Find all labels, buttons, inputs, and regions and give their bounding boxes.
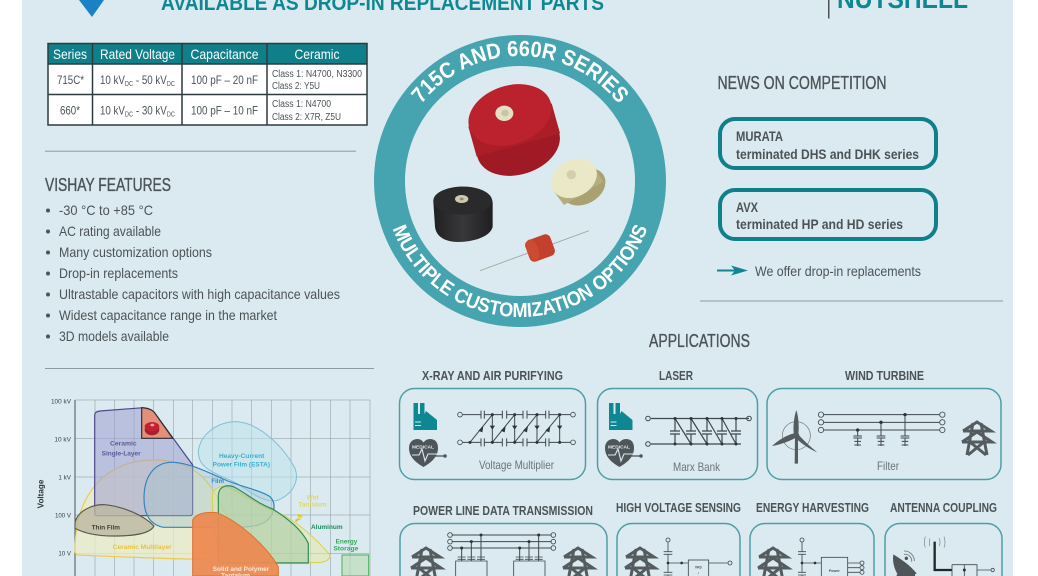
application: antenna coupling [885, 500, 1002, 576]
heading: news on competition: NEWS ON COMPETITION [718, 73, 886, 93]
circuit: sensing: VRS [695, 566, 703, 570]
region: energy storage [342, 555, 369, 576]
icon: satellite dish and antenna [893, 537, 994, 576]
chart labels: Storage [333, 546, 359, 553]
capacitor: black [433, 187, 493, 242]
circuit: sensing [664, 538, 732, 576]
application: x-ray and air purifying: Voltage Multiplier [479, 458, 554, 472]
specification table: 10 kV [100, 73, 131, 87]
region: highlight series [142, 408, 173, 438]
arrow: wet tantalum pointer [295, 514, 303, 523]
specification table [48, 44, 367, 125]
chart labels: Power Film (ESTA) [213, 461, 270, 468]
application: power line data transmission: POWER LINE DATA TRANSMISSION [413, 503, 593, 518]
badge: product ring [374, 35, 666, 327]
application: energy harvesting [750, 500, 874, 576]
specification table: Rated Voltage [100, 46, 175, 62]
heading: nutshell [828, 0, 968, 18]
application: power line data transmission [400, 503, 607, 576]
chart labels: Heavy-Current [219, 453, 265, 460]
capacitor: large red [460, 74, 568, 186]
feature list: -30 °C to +85 °C [59, 202, 153, 218]
axis labels: 100 V [55, 512, 72, 519]
capacitor: axial red [480, 231, 589, 271]
region: aluminum [218, 486, 308, 563]
chart labels: Wet [307, 495, 319, 502]
region: wet tantalum [212, 487, 330, 563]
note: drop-in replacements: We offer drop-in replacements [755, 263, 921, 279]
feature list: Ultrastable capacitors with high capacitance values [59, 286, 340, 302]
specification table: DC [167, 112, 175, 118]
axis labels: 10 V [58, 551, 72, 558]
application: laser: Marx Bank [673, 460, 721, 474]
ring text: top: 715C AND 660R SERIES [410, 40, 628, 102]
logo triangle [79, 0, 104, 17]
specification table: Capacitance [190, 46, 259, 62]
axis labels: 10 kV [54, 436, 72, 443]
heading: applications: APPLICATIONS [649, 331, 750, 351]
chart labels: Single-Layer [102, 450, 141, 457]
circuit: voltage multiplier [458, 411, 575, 446]
application: high voltage sensing [616, 500, 741, 576]
circuit: sensing: / [698, 570, 700, 575]
specification table: Class 2: X7R, Z5U [272, 112, 341, 123]
region: ceramic multilayer [75, 460, 250, 560]
axis labels: 1 kV [58, 474, 72, 481]
specification table: - 30 kV [133, 104, 167, 118]
specification table: DC [125, 81, 133, 88]
application: laser [598, 368, 758, 480]
application: wind turbine: WIND TURBINE [845, 368, 924, 383]
feature list: 3D models available [59, 328, 169, 344]
arrow: drop-in note [717, 266, 748, 276]
feature list: AC rating available [59, 223, 161, 239]
feature list: Widest capacitance range in the market [59, 307, 277, 323]
specification table: Ceramic [294, 46, 340, 62]
specification table: 715C* [57, 73, 84, 87]
feature list [46, 202, 340, 344]
chart labels: Film [211, 478, 224, 485]
circuit: marx bank [646, 416, 751, 446]
icon: wind turbine [772, 410, 817, 464]
application: high voltage sensing: HIGH VOLTAGE SENSING [616, 500, 741, 515]
capacitor: cream [544, 151, 612, 213]
heading: vishay features: VISHAY FEATURES [45, 175, 171, 195]
specification table: 10 kV [100, 104, 131, 118]
callout: murata: terminated DHS and DHK series [736, 146, 919, 162]
region: solid and polymer tantalum [193, 512, 278, 576]
specification table: 100 pF – 20 nF [191, 73, 258, 87]
specification table: Class 1: N4700 [272, 99, 331, 110]
circuit: harvesting: Power [829, 569, 840, 573]
application: x-ray and air purifying [400, 368, 586, 480]
feature list: Many customization options [59, 244, 212, 260]
application: energy harvesting: ENERGY HARVESTING [756, 500, 869, 515]
ring text: bottom: MULTIPLE CUSTOMIZATION OPTIONS [392, 224, 646, 317]
feature list: Drop-in replacements [59, 265, 178, 281]
region: film [144, 462, 274, 527]
callout: avx [720, 190, 936, 239]
specification table: Class 1: N4700, N3300 [272, 69, 362, 80]
region: thin film [75, 505, 154, 536]
chart labels: Solid and Polymer [213, 566, 270, 573]
chart labels: Ceramic Multilayer [113, 544, 172, 551]
specification table: DC [125, 112, 133, 118]
axis labels [51, 398, 72, 558]
callout: avx: AVX [736, 199, 759, 215]
application: wind turbine [767, 368, 1001, 480]
axis labels: 100 kV [51, 398, 72, 405]
callout: avx: terminated HP and HD series [736, 216, 903, 232]
chart: capacitor technologies voltage map [36, 398, 370, 576]
application: x-ray and air purifying: X-RAY AND AIR PURIFYING [422, 368, 563, 383]
chart labels: Tantalum [298, 502, 327, 509]
specification table: 100 pF – 10 nF [191, 104, 258, 118]
application: antenna coupling: ANTENNA COUPLING [890, 500, 997, 515]
region: ceramic single-layer [95, 408, 193, 516]
chart: capacitor technologies voltage map: Voltage [36, 479, 45, 508]
specification table: Class 2: Y5U [272, 81, 320, 92]
application: wind turbine: Filter [877, 459, 899, 473]
chart labels [92, 440, 359, 576]
specification table: DC [167, 81, 175, 88]
circuit: coupling [448, 533, 556, 576]
product photos [433, 74, 612, 271]
specification table: Series [53, 46, 87, 62]
callout: murata [720, 119, 936, 168]
chart labels: Ceramic [110, 440, 137, 447]
callout: murata: MURATA [736, 128, 783, 144]
chart labels: Thin Film [92, 524, 120, 531]
chart labels: Aluminum [311, 524, 343, 531]
region: heavy-current power film [198, 422, 296, 501]
chart labels: Energy [336, 539, 358, 546]
specification table: - 50 kV [133, 73, 167, 87]
circuit: filter [818, 412, 945, 446]
icon: red capacitor [145, 422, 159, 435]
application: laser: LASER [659, 368, 693, 383]
chart grid [75, 400, 370, 576]
specification table: 660* [60, 104, 80, 118]
